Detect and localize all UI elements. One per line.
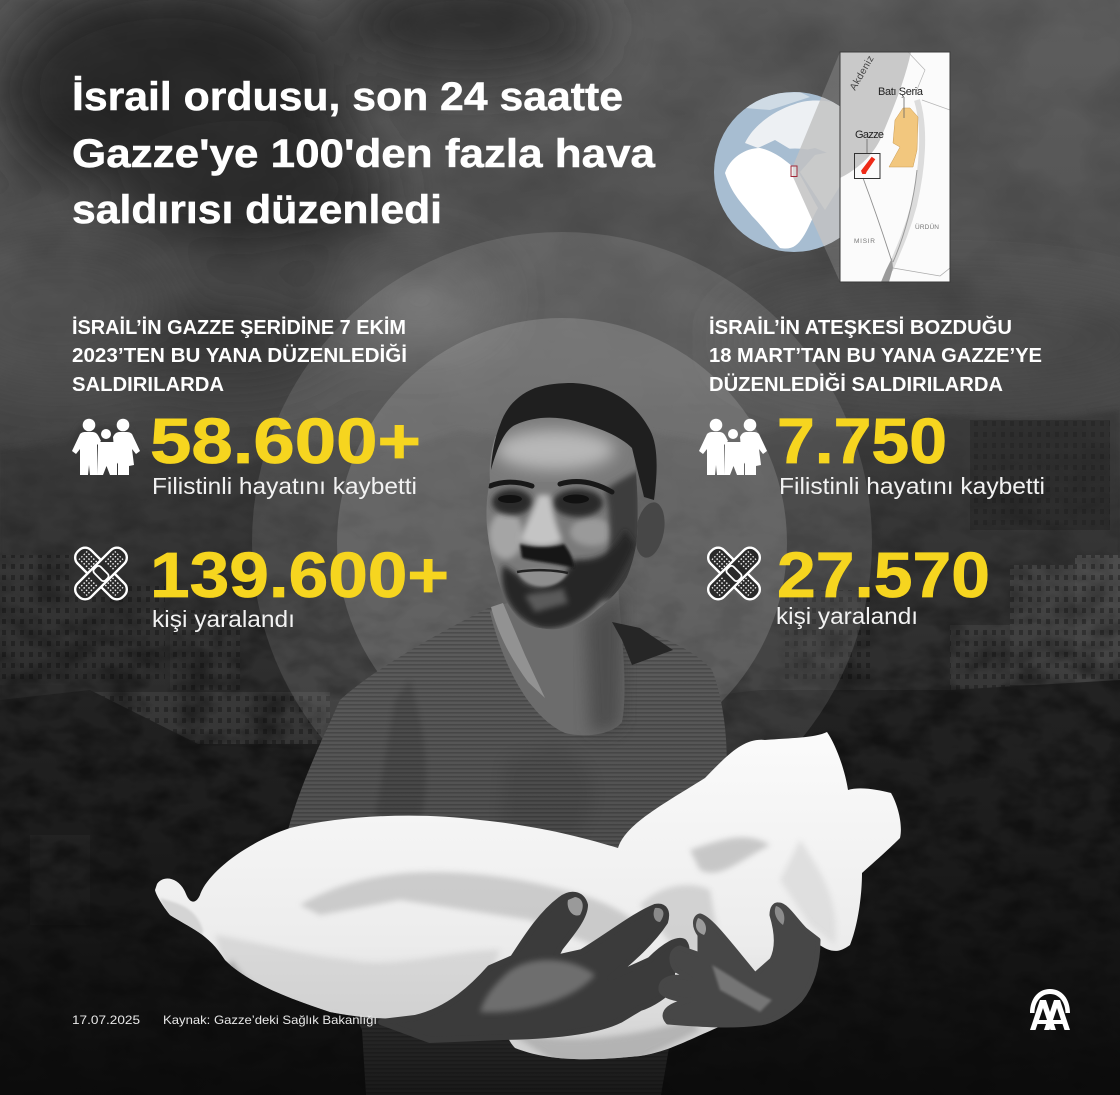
zoom wedge	[793, 52, 840, 282]
title: saldırısı düzenledi	[72, 188, 442, 232]
icon: crossed bandages	[705, 544, 763, 603]
right heading	[709, 315, 1042, 396]
background circles behind the man	[252, 232, 872, 852]
deaths caption: Filistinli hayatını kaybetti	[152, 473, 417, 499]
map panel	[840, 52, 950, 282]
map panel: Gazze	[855, 129, 884, 141]
photo: man holding shrouded child	[155, 383, 901, 1095]
map labels: Batı Şeria	[878, 86, 924, 98]
shrouded child: white cloth	[155, 732, 901, 1065]
title: Gazze'ye 100'den fazla hava	[72, 132, 656, 176]
gaza strip	[861, 157, 875, 174]
logo: Anadolu Agency	[1030, 989, 1070, 1030]
icon: family	[72, 419, 140, 475]
left heading: İSRAİL’İN GAZZE ŞERİDİNE 7 EKİM	[72, 316, 406, 339]
deaths figure: 58.600+	[150, 405, 421, 477]
man: torso and shirt	[288, 607, 727, 1095]
left heading	[72, 316, 407, 396]
map panel: Akdeniz	[848, 54, 877, 92]
man: face	[486, 413, 642, 629]
date: 17.07.2025	[72, 1013, 140, 1027]
man: hair	[491, 383, 657, 500]
injured caption: kişi yaralandı	[776, 603, 918, 629]
injured caption: kişi yaralandı	[152, 606, 295, 632]
right heading: DÜZENLEDİĞİ SALDIRILARDA	[709, 372, 1003, 396]
map panel: ÜRDÜN	[915, 223, 939, 231]
man: ear	[631, 500, 669, 560]
location marker	[791, 166, 797, 176]
panel border	[840, 52, 950, 282]
gaza box	[854, 154, 880, 178]
sea	[840, 52, 911, 178]
right heading: 18 MART’TAN BU YANA GAZZE’YE	[709, 345, 1042, 367]
deaths figure: 7.750	[777, 405, 947, 477]
left heading: 2023’TEN BU YANA DÜZENLEDİĞİ	[72, 343, 407, 367]
west bank	[889, 108, 918, 167]
wedge shading over globe	[793, 97, 840, 246]
right stats block	[699, 315, 1045, 629]
icon: crossed bandages	[72, 544, 130, 603]
icon: family	[699, 419, 767, 475]
globe	[714, 92, 840, 252]
left stats block	[72, 316, 449, 632]
right heading: İSRAİL’İN ATEŞKESİ BOZDUĞU	[709, 315, 1012, 339]
source: Kaynak: Gazze’deki Sağlık Bakanlığı	[163, 1013, 377, 1027]
left heading: SALDIRILARDA	[72, 374, 224, 396]
locator map	[714, 52, 950, 282]
deaths caption: Filistinli hayatını kaybetti	[779, 473, 1045, 499]
man: left forearm and hand	[381, 895, 687, 1040]
title	[72, 75, 656, 232]
injured figure: 27.570	[777, 539, 990, 611]
map panel: MISIR	[854, 238, 875, 245]
man: right hand	[661, 905, 818, 1025]
man: neck and collar	[490, 585, 673, 735]
injured figure: 139.600+	[150, 539, 449, 611]
title: İsrail ordusu, son 24 saatte	[72, 75, 623, 119]
